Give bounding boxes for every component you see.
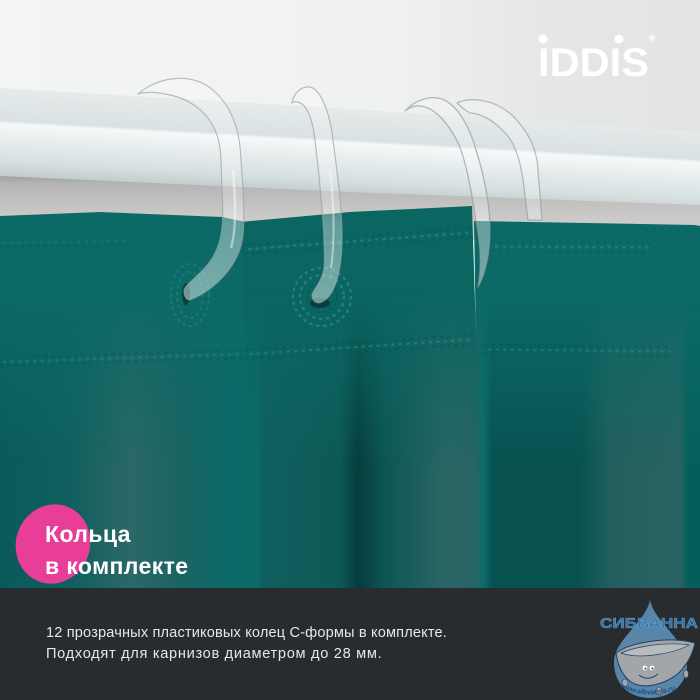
curtain panel: right bbox=[474, 221, 700, 588]
ring 2 bbox=[292, 87, 342, 303]
wall background bbox=[0, 0, 700, 132]
description text: 12 прозрачных пластиковых колец С-формы в комплекте. bbox=[46, 625, 447, 641]
description text bbox=[46, 625, 447, 662]
face bbox=[639, 666, 658, 678]
footer panel bbox=[0, 588, 700, 700]
fabric folds bbox=[0, 302, 700, 588]
curtain panels bbox=[0, 200, 700, 588]
grommets bbox=[171, 264, 351, 326]
grommet middle bbox=[293, 268, 351, 326]
ring 3 bbox=[405, 98, 490, 287]
watermark logo: Sibvanna bbox=[600, 600, 698, 698]
curtain panel: middle bbox=[240, 206, 484, 588]
tub rim bbox=[621, 644, 689, 656]
brand logo: IDDIS: IDDIS bbox=[538, 41, 649, 85]
tub body bbox=[616, 640, 695, 686]
tub legs bbox=[622, 670, 688, 695]
drop bbox=[614, 600, 687, 698]
description text: Подходят для карнизов диаметром до 28 мм. bbox=[46, 646, 382, 662]
upper stitches bbox=[0, 228, 650, 254]
brand text: СИБВАННА bbox=[600, 615, 698, 632]
ring 1 bbox=[138, 78, 244, 300]
url: www.sibvanna.ru bbox=[620, 684, 676, 694]
ring 4 bbox=[457, 100, 542, 220]
rings bbox=[138, 78, 542, 303]
pink blob bbox=[5, 494, 101, 594]
heading: в комплекте bbox=[45, 553, 188, 579]
curtain panel: left bbox=[0, 212, 262, 588]
lower stitches bbox=[0, 335, 670, 366]
curtain rod bbox=[0, 88, 700, 219]
stitching rows bbox=[0, 228, 670, 366]
heading: Кольца bbox=[45, 521, 131, 547]
grommet left bbox=[171, 264, 209, 326]
shadow band under rod bbox=[0, 176, 700, 240]
heading bbox=[45, 521, 188, 579]
